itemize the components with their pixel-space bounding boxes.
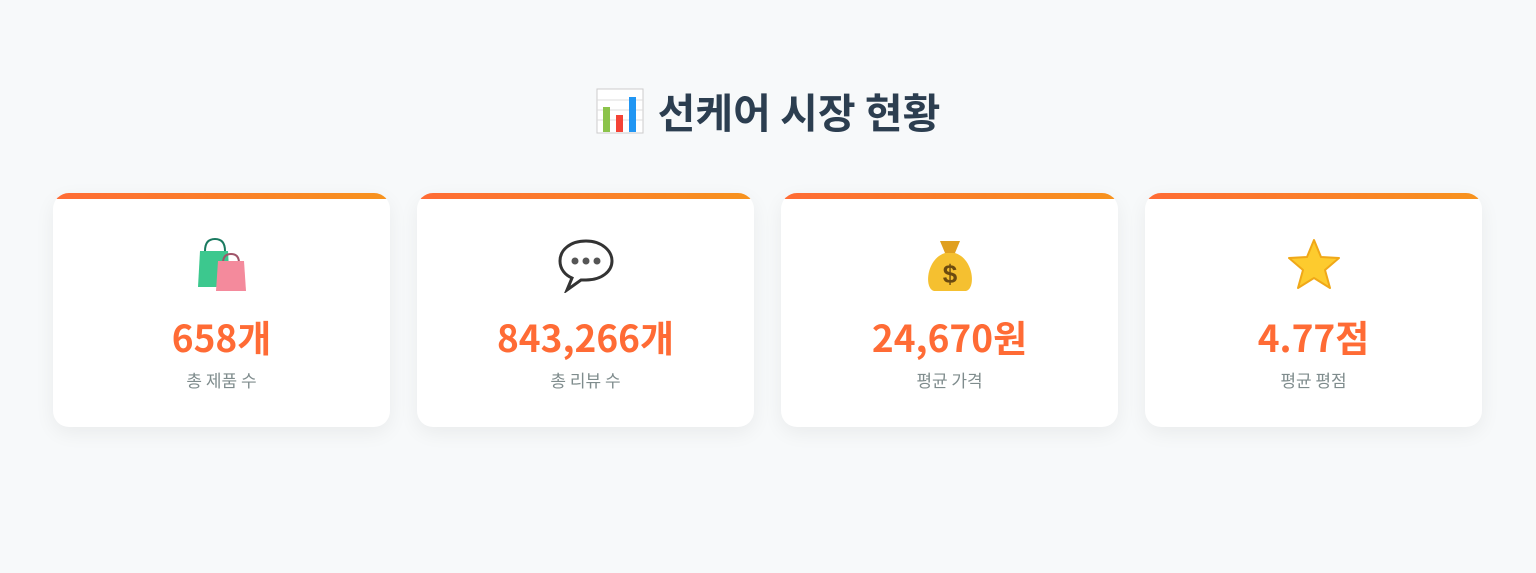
card: reviews: 총 리뷰 수 — [550, 367, 621, 392]
card: price: 평균 가격 — [916, 367, 983, 392]
card: reviews: 843,266개 — [497, 309, 674, 363]
icon: money bag: $ — [942, 259, 957, 289]
card: rating: 4.77점 — [1258, 309, 1369, 363]
icon: shopping bags — [198, 238, 246, 291]
icon: star — [1288, 239, 1340, 289]
title: 선케어 시장 현황 — [658, 80, 940, 140]
card: price — [781, 193, 1118, 427]
card: rating: 평균 평점 — [1280, 367, 1347, 392]
card: rating — [1145, 193, 1482, 427]
card: price: 24,670원 — [872, 309, 1027, 363]
card: products — [53, 193, 390, 427]
card: reviews — [417, 193, 754, 427]
card: products: 총 제품 수 — [186, 367, 257, 392]
icon: money bag — [928, 241, 972, 291]
icon: speech bubble — [558, 240, 614, 293]
card: products: 658개 — [172, 309, 271, 363]
